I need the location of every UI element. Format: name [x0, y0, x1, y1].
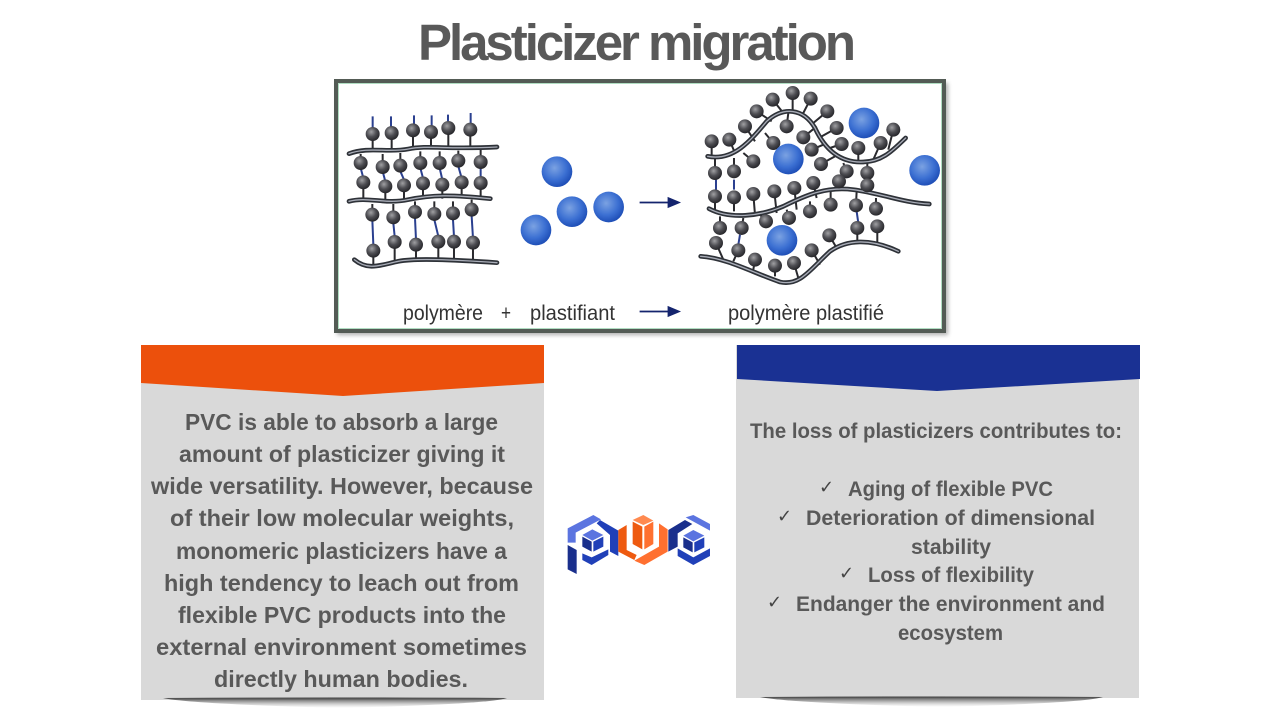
check item: dimensional stability: Deterioration of dimensional	[806, 506, 1095, 530]
left panel text: amount of plasticizer giving it	[179, 441, 505, 467]
diagram: unplasticized polymer	[349, 113, 624, 266]
panel: right effects list	[736, 345, 1140, 707]
check item: environment: ecosystem	[898, 621, 1003, 645]
left panel text: external environment sometimes	[156, 634, 527, 660]
check item: environment	[767, 592, 1105, 645]
panel: left description	[141, 345, 544, 708]
left panel text: monomeric plasticizers have a	[176, 538, 508, 564]
caption: polymère plastifié: polymère plastifié	[728, 302, 884, 325]
panel: polymer and plasticizer diagram	[336, 81, 948, 335]
left panel text	[150, 409, 533, 692]
check item: aging: ✓	[819, 477, 834, 498]
check item: aging: Aging of flexible PVC	[848, 477, 1053, 501]
right panel shadow	[760, 696, 1103, 707]
right panel header	[737, 345, 1140, 391]
icon: PVC logo	[568, 515, 710, 574]
diagram: plasticized polymer	[701, 86, 940, 283]
left panel text: high tendency to leach out from	[164, 570, 519, 596]
check item: environment: Endanger the environment and	[796, 592, 1105, 616]
left panel text: directly human bodies.	[214, 666, 468, 692]
check item: environment: ✓	[767, 592, 782, 613]
left panel shadow	[163, 698, 507, 708]
check item: flexibility: Loss of flexibility	[868, 563, 1034, 587]
left panel text: of their low molecular weights,	[170, 505, 514, 531]
check item: dimensional stability	[777, 506, 1095, 559]
caption: polymère: polymère	[403, 302, 483, 325]
left panel text: PVC is able to absorb a large	[185, 409, 498, 435]
right panel intro: The loss of plasticizers contributes to:	[750, 419, 1122, 443]
left panel header	[141, 345, 544, 396]
title: Plasticizer migration	[418, 14, 856, 71]
check item: flexibility: ✓	[839, 563, 854, 584]
check item: dimensional stability: stability	[911, 535, 991, 559]
caption: plastifiant: plastifiant	[530, 302, 615, 325]
left panel text: flexible PVC products into the	[178, 602, 506, 628]
left panel text: wide versatility. However, because	[150, 473, 533, 499]
check item: dimensional stability: ✓	[777, 506, 792, 527]
caption: plus: +	[501, 302, 511, 325]
arrow: reaction	[640, 198, 680, 208]
arrow: caption	[640, 306, 680, 316]
